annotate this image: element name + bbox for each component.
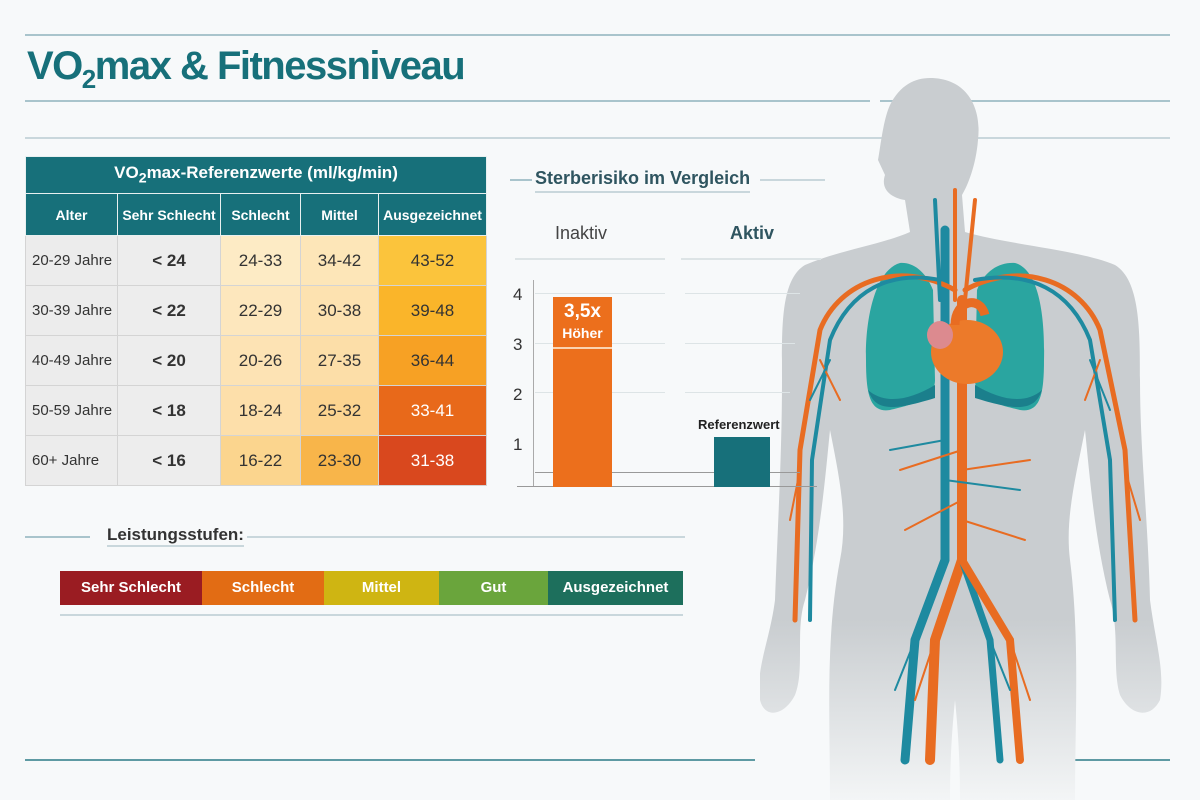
- reference table: 34-42: [318, 250, 361, 270]
- reference table: 60+ Jahre: [32, 452, 99, 469]
- reference table: 16-22: [239, 450, 282, 470]
- reference table: 20-29 Jahre: [32, 252, 112, 269]
- reference table: 18-24: [239, 400, 282, 420]
- reference table: 33-41: [411, 400, 454, 420]
- lungs: [866, 263, 935, 410]
- reference table: < 20: [152, 350, 186, 370]
- reference table: < 22: [152, 300, 186, 320]
- body silhouette: [759, 78, 1161, 800]
- reference table: 20-26: [239, 350, 282, 370]
- bar: inaktiv: 3,5x: [564, 301, 601, 322]
- bar: inaktiv: Höher: [562, 325, 603, 341]
- reference table: 40-49 Jahre: [32, 352, 112, 369]
- legend bar: Ausgezeichnet: [563, 579, 668, 596]
- reference table: Schlecht: [231, 206, 290, 222]
- chart title: Sterberisiko im Vergleich: [535, 168, 750, 188]
- reference table: Mittel: [321, 206, 358, 222]
- legend bar: Sehr Schlecht: [81, 579, 181, 596]
- reference table: 30-39 Jahre: [32, 302, 112, 319]
- y axis: [513, 285, 522, 454]
- y axis: 2: [513, 385, 522, 404]
- decorative lines: [25, 34, 1170, 36]
- reference table: Ausgezeichnet: [383, 206, 482, 222]
- bar label: Referenzwert: [698, 417, 780, 432]
- column labels: Inaktiv: [555, 223, 607, 243]
- reference table: 50-59 Jahre: [32, 402, 112, 419]
- reference table: 36-44: [411, 350, 454, 370]
- y axis: 3: [513, 335, 522, 354]
- reference table: 25-32: [318, 400, 361, 420]
- chart: Sterberisiko: Aktiv: [730, 223, 774, 243]
- reference table: 23-30: [318, 450, 361, 470]
- reference table: < 18: [152, 400, 186, 420]
- legend bar: Mittel: [362, 579, 401, 596]
- heart: [931, 320, 1003, 384]
- human body illustration: [760, 78, 1162, 782]
- legend bar: Schlecht: [232, 579, 294, 596]
- y axis: 4: [513, 285, 522, 304]
- reference table: < 16: [152, 450, 186, 470]
- reference table: < 24: [152, 250, 186, 270]
- bar: aktiv: [714, 437, 770, 487]
- reference table: 31-38: [411, 450, 454, 470]
- reference table: 27-35: [318, 350, 361, 370]
- reference table: Sehr Schlecht: [122, 206, 216, 222]
- chart: Sterberisiko: [510, 168, 825, 487]
- reference table: 22-29: [239, 300, 282, 320]
- reference table: VO2max-Referenzwerte (ml/kg/min): [114, 163, 398, 187]
- title: VO2max & Fitnessniveau: [27, 44, 464, 94]
- reference table: 24-33: [239, 250, 282, 270]
- legend bar: [60, 571, 683, 605]
- reference table: 30-38: [318, 300, 361, 320]
- legend heading: Leistungsstufen:: [107, 525, 244, 544]
- reference table: 39-48: [411, 300, 454, 320]
- reference table: [25, 156, 487, 486]
- bar: inaktiv: [553, 297, 612, 487]
- legend bar: Gut: [481, 579, 506, 596]
- y axis: 1: [513, 435, 522, 454]
- reference table: Alter: [56, 206, 87, 222]
- reference table: 43-52: [411, 250, 454, 270]
- vessels: [790, 190, 1140, 760]
